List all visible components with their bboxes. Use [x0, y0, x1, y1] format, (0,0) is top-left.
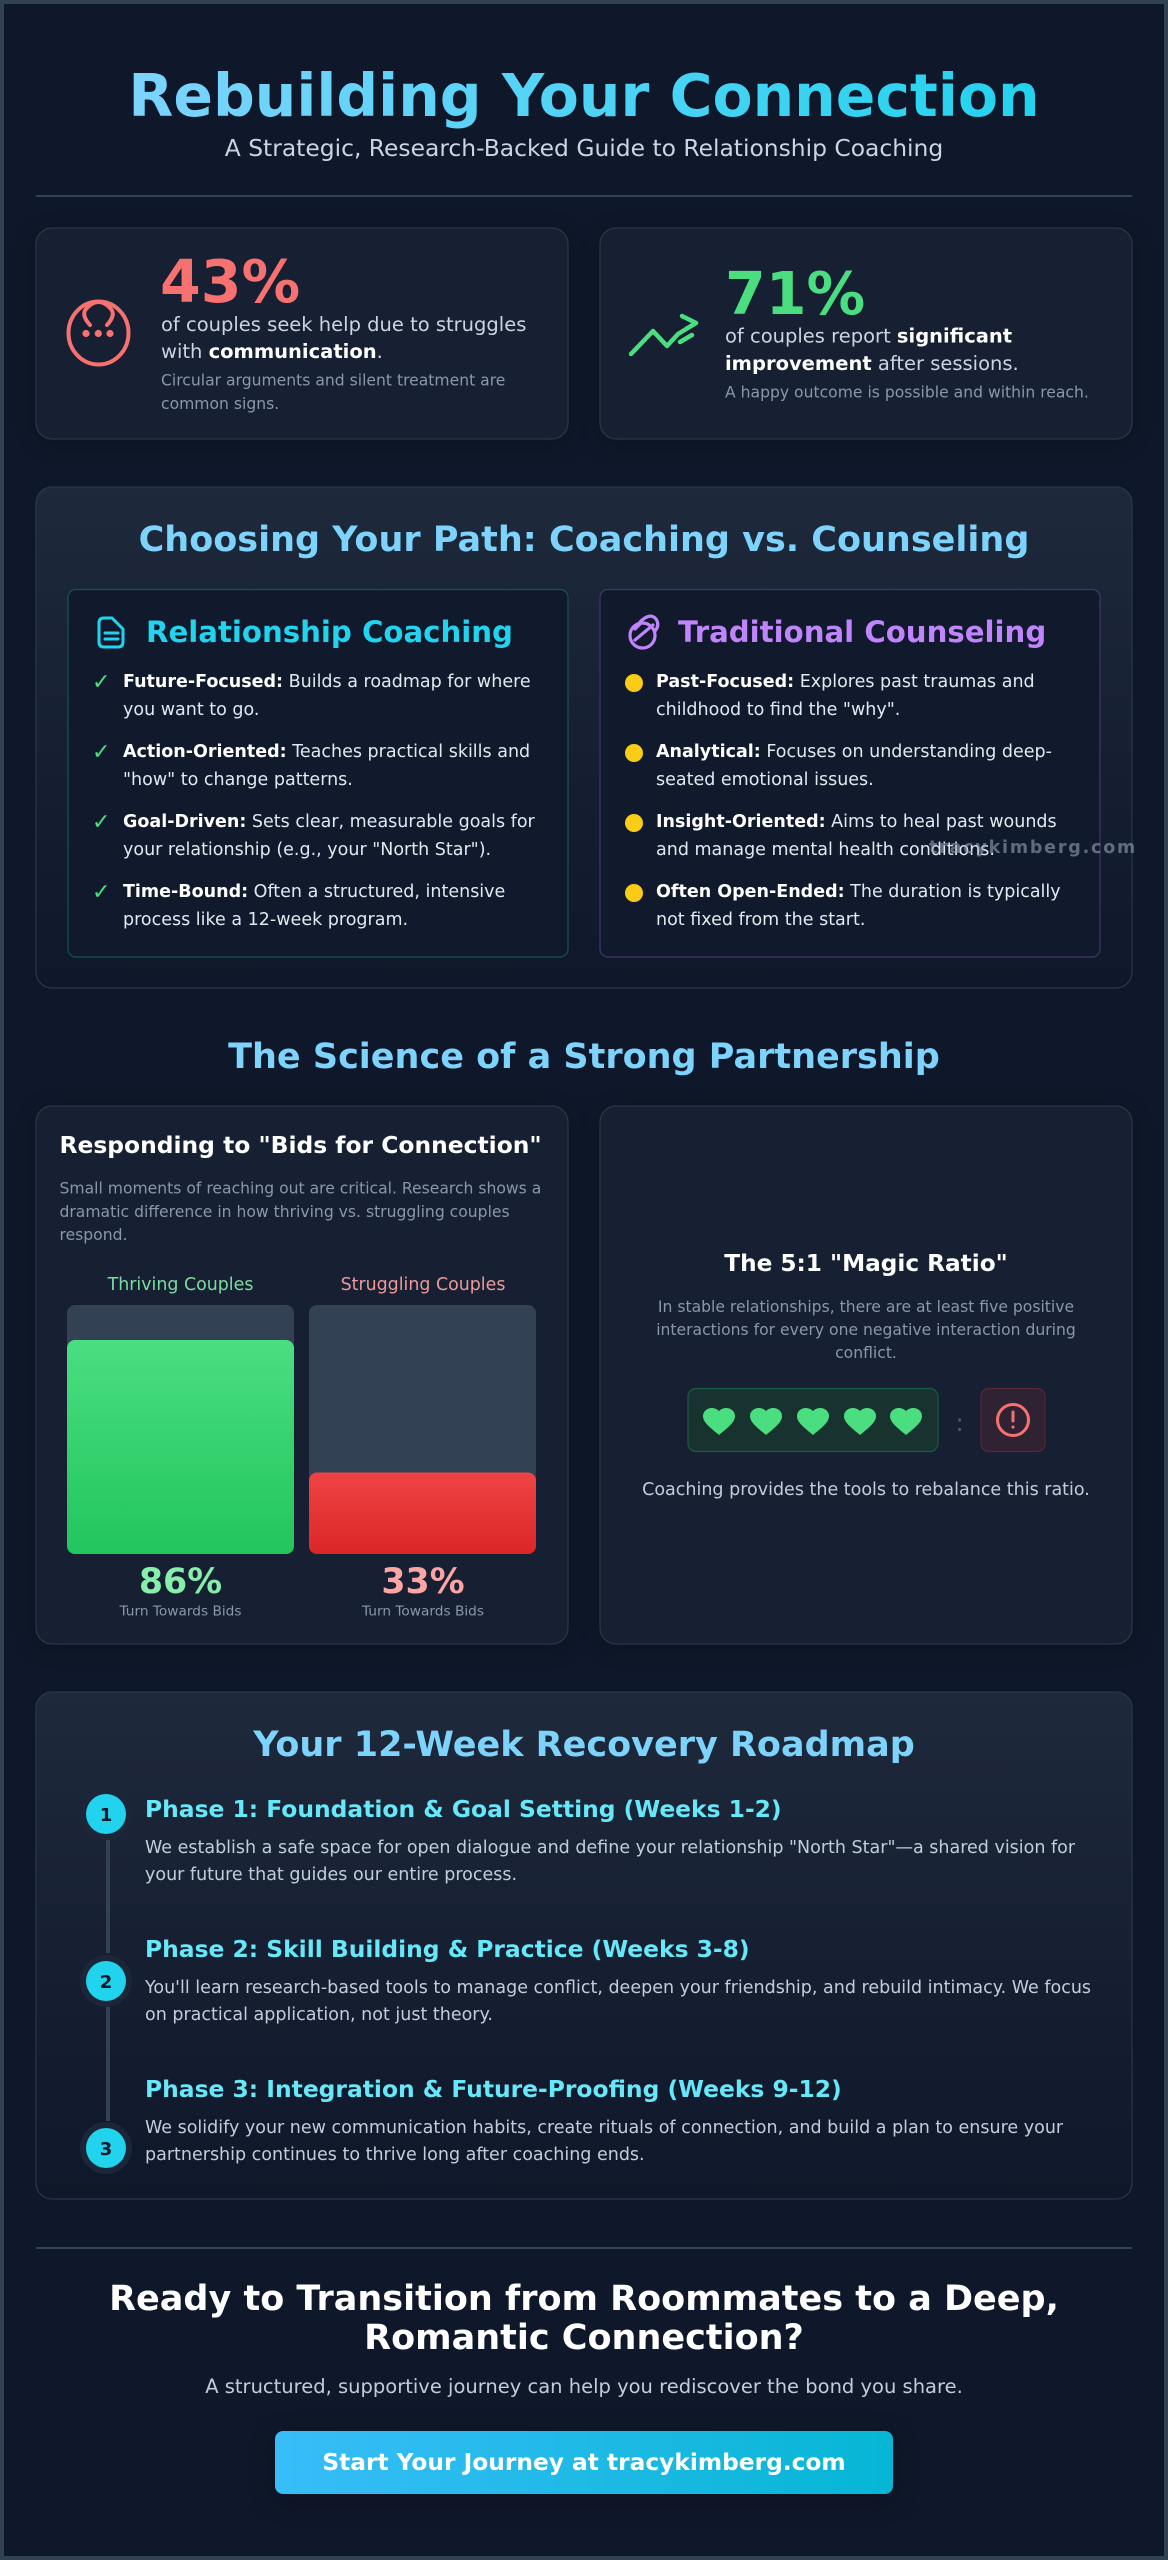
panel: coaching vs counseling: [36, 487, 1137, 988]
stat note: common signs.: [161, 395, 279, 413]
bullet list: [625, 672, 1061, 930]
checklist: you want to go.: [123, 700, 259, 720]
panel: roadmap: [36, 1692, 1132, 2199]
checklist: process like a 12-week program.: [123, 910, 408, 930]
phase 2: You'll learn research-based tools to manage conflict, deepen your friendship, and rebuild intimacy. We focus: [145, 1978, 1091, 1998]
icon: pill: [630, 616, 658, 648]
description: conflict.: [835, 1344, 897, 1362]
stat value: 71%: [725, 260, 865, 328]
checklist: Time-Bound: Often a structured, intensive: [123, 882, 505, 902]
panel: relationship coaching: [68, 590, 568, 957]
call to action: [109, 2279, 1059, 2494]
description: dramatic difference in how thriving vs. struggling couples: [60, 1203, 510, 1221]
bullet list: and manage mental health conditions.: [656, 840, 995, 860]
checklist: ✓: [92, 880, 110, 905]
subtitle: A Strategic, Research-Backed Guide to Relationship Coaching: [225, 134, 943, 162]
phase 3: partnership continues to thrive long after coaching ends.: [145, 2145, 645, 2165]
bullet list: Analytical: Focuses on understanding deep-: [656, 742, 1052, 762]
phase 3: [145, 2075, 1064, 2165]
stat note: A happy outcome is possible and within reach.: [725, 384, 1089, 402]
stat description: of couples seek help due to struggles: [161, 313, 526, 336]
bar: thriving: Turn Towards Bids: [119, 1604, 241, 1620]
panel: bids for connection: [36, 1106, 568, 1644]
phase 2: [144, 1935, 1091, 2025]
step 1 marker: 1: [100, 1805, 112, 1826]
bar: struggling: Turn Towards Bids: [361, 1604, 484, 1620]
bullet list: childhood to find the "why".: [656, 700, 900, 720]
checklist: [92, 670, 536, 930]
phase 1: We establish a safe space for open dialogue and define your relationship "North Star"—a shared vision for: [145, 1838, 1075, 1858]
cta heading: Romantic Connection?: [364, 2318, 804, 2358]
stat note: Circular arguments and silent treatment are: [161, 372, 505, 390]
ratio: positive hearts: [688, 1388, 938, 1452]
bar: thriving: 86%: [139, 1562, 222, 1602]
bullet list: seated emotional issues.: [656, 770, 874, 790]
checklist: ✓: [92, 670, 110, 695]
cta subtext: A structured, supportive journey can help you rediscover the bond you share.: [205, 2375, 963, 2398]
checklist: "how" to change patterns.: [123, 770, 353, 790]
bar chart: [67, 1275, 536, 1620]
watermark: tracykimberg.com: [929, 838, 1137, 858]
description: respond.: [60, 1226, 127, 1244]
phase 3: Phase 3: Integration & Future-Proofing (Weeks 9-12): [145, 2075, 842, 2103]
title: Rebuilding Your Connection: [128, 62, 1040, 130]
step 3 marker: [80, 2122, 132, 2174]
timeline: [80, 1788, 132, 2174]
bullet list: Past-Focused: Explores past traumas and: [656, 672, 1035, 692]
closing line: Coaching provides the tools to rebalance this ratio.: [642, 1480, 1090, 1500]
panel heading: The 5:1 "Magic Ratio": [724, 1250, 1008, 1277]
bar: thriving: [67, 1275, 294, 1620]
panel heading: Traditional Counseling: [678, 615, 1046, 649]
panel: traditional counseling: [600, 590, 1100, 957]
checklist: ✓: [92, 810, 110, 835]
checklist: Goal-Driven: Sets clear, measurable goals for: [123, 812, 536, 832]
ratio: negative alert: [981, 1388, 1045, 1452]
bar: thriving: Thriving Couples: [107, 1275, 253, 1295]
description: interactions for every one negative interaction during: [656, 1321, 1076, 1339]
step 2 marker: 2: [100, 1972, 112, 1993]
description: Small moments of reaching out are critical. Research shows a: [60, 1180, 541, 1198]
checklist: Action-Oriented: Teaches practical skills and: [123, 742, 530, 762]
bar: struggling: [309, 1275, 536, 1620]
icon: trend up: [631, 316, 696, 354]
icon: document: [99, 618, 123, 647]
stat value: 43%: [160, 248, 300, 316]
header: [128, 62, 1040, 162]
cta heading: Ready to Transition from Roommates to a Deep,: [109, 2279, 1059, 2319]
section heading: science: The Science of a Strong Partnership: [228, 1037, 940, 1077]
bullet list: Insight-Oriented: Aims to heal past wounds: [656, 812, 1057, 832]
phase 2: on practical application, not just theory.: [145, 2005, 493, 2025]
phase 1: your future that guides our entire process.: [145, 1865, 517, 1885]
bullet list: Often Open-Ended: The duration is typically: [656, 882, 1061, 902]
step 2 marker: [80, 1955, 132, 2007]
step 1 marker: [80, 1788, 132, 1840]
description: In stable relationships, there are at least five positive: [658, 1298, 1074, 1316]
checklist: ✓: [92, 740, 110, 765]
icon: communication struggle: [68, 302, 128, 364]
panel: 71% stat: [600, 228, 1132, 439]
cta button: Start Your Journey at tracykimberg.com: [322, 2449, 846, 2476]
phase 1: Phase 1: Foundation & Goal Setting (Weeks 1-2): [145, 1795, 782, 1823]
phase 3: We solidify your new communication habits, create rituals of connection, and build a plan to ensure your: [145, 2118, 1063, 2138]
cta button: [275, 2431, 893, 2494]
heading: Choosing Your Path: Coaching vs. Counseling: [139, 520, 1029, 560]
phase 2: Phase 2: Skill Building & Practice (Weeks 3-8): [145, 1935, 750, 1963]
panel heading: Responding to "Bids for Connection": [60, 1131, 542, 1159]
bar: struggling: 33%: [381, 1562, 465, 1602]
bullet list: not fixed from the start.: [656, 910, 865, 930]
stat description second line: with communication.: [161, 340, 383, 363]
ratio separator: :: [955, 1409, 964, 1437]
step 3 marker: 3: [100, 2139, 112, 2160]
phase 1: [145, 1795, 1076, 1885]
heading: Your 12-Week Recovery Roadmap: [252, 1725, 915, 1765]
bar: struggling: Struggling Couples: [341, 1275, 505, 1295]
checklist: Future-Focused: Builds a roadmap for where: [123, 672, 531, 692]
panel heading: Relationship Coaching: [146, 615, 513, 649]
panel: 43% stat: [36, 228, 568, 439]
checklist: your relationship (e.g., your "North Star").: [123, 840, 491, 860]
stat description: of couples report significant: [725, 324, 1012, 348]
stat description second line: improvement after sessions.: [725, 352, 1019, 375]
panel: magic ratio: [600, 1106, 1132, 1644]
